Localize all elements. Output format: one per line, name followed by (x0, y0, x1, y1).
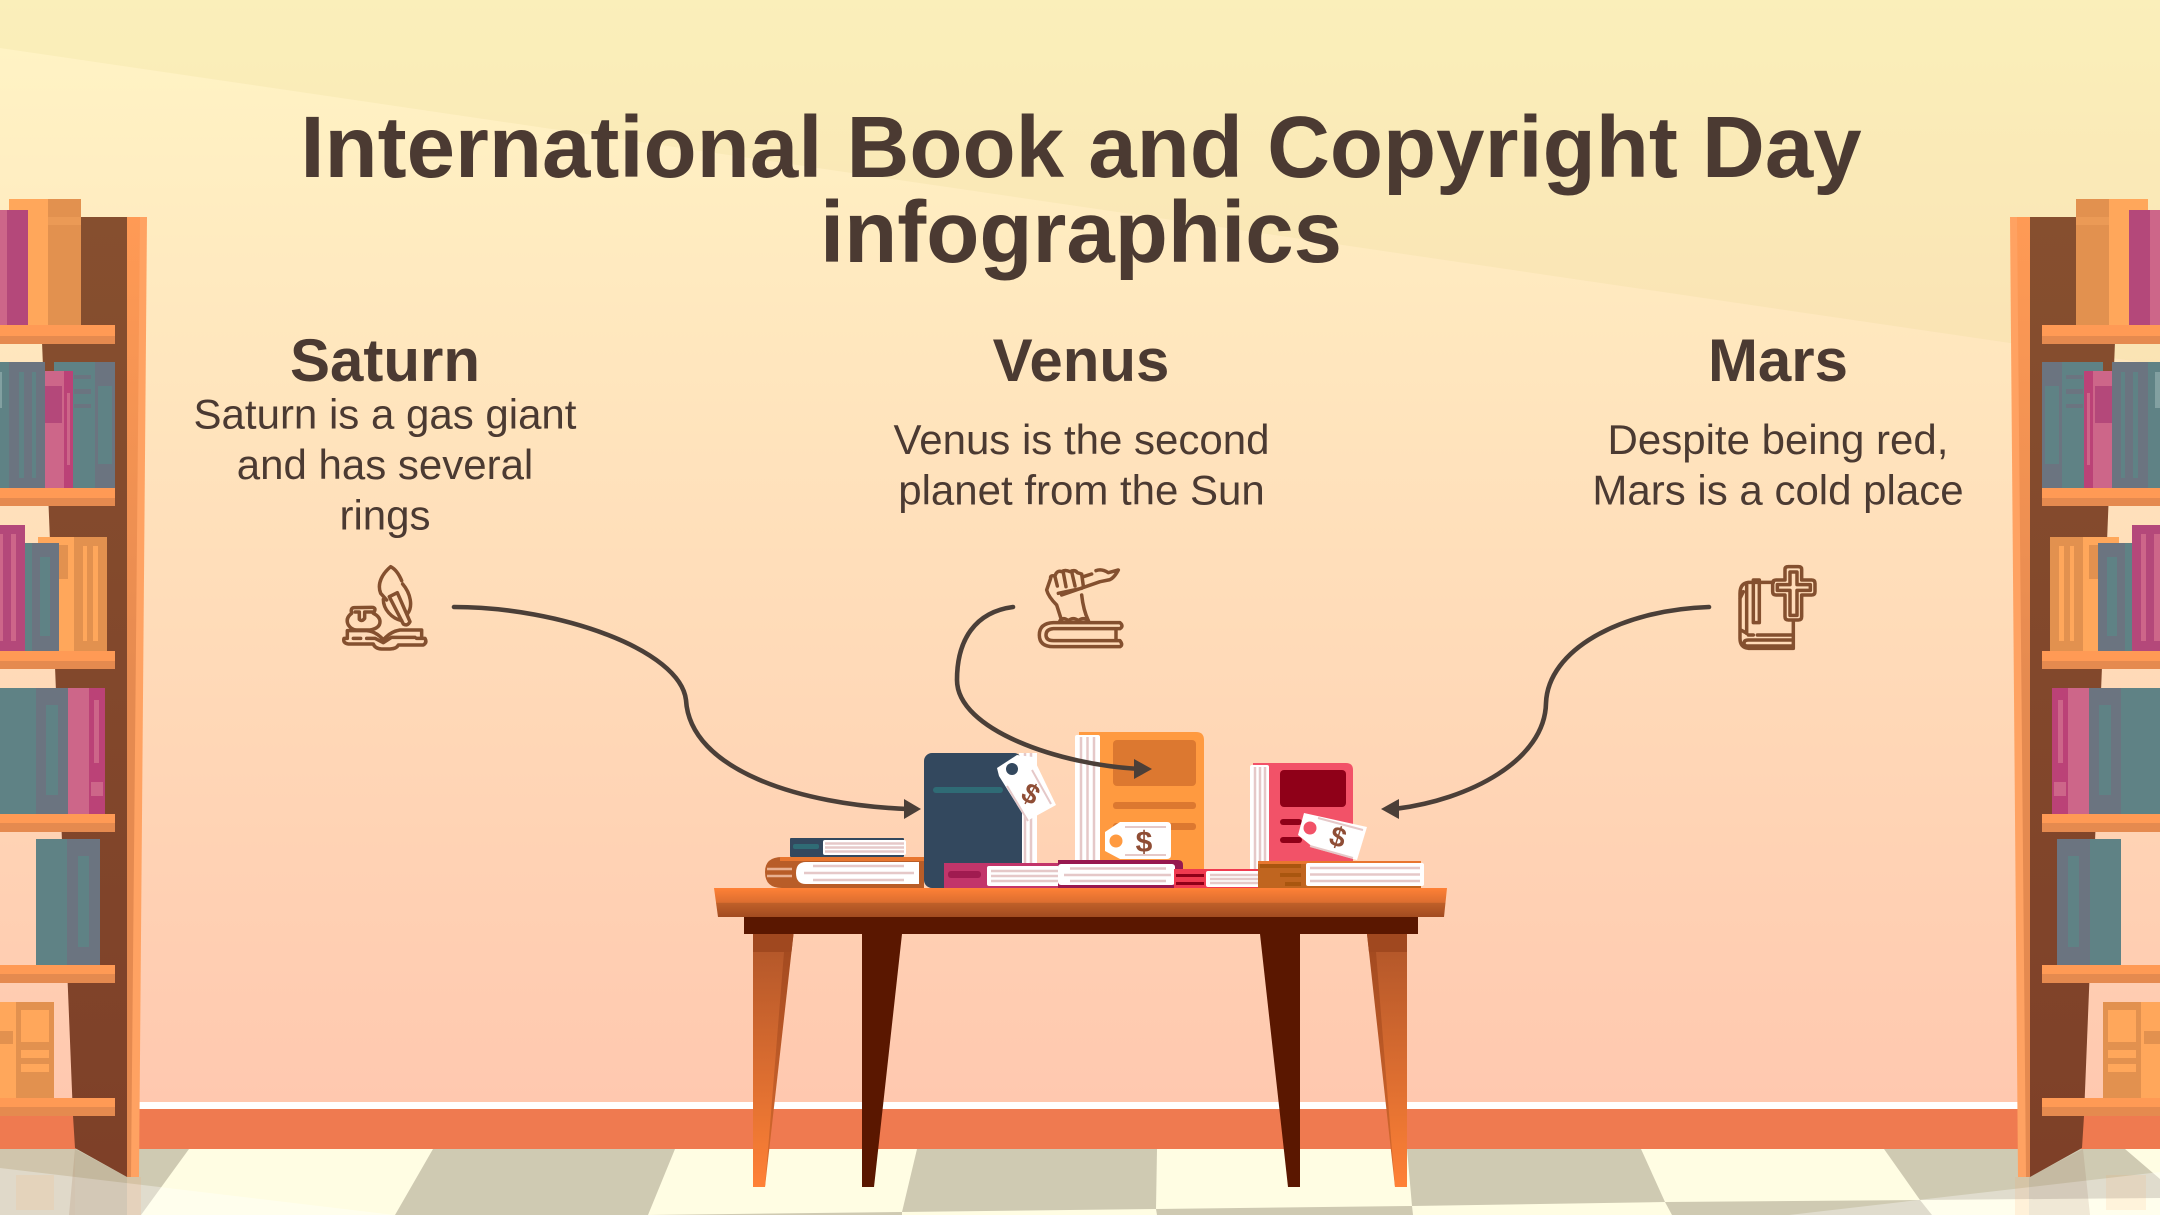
column: Venus (894, 327, 1269, 513)
red book (1250, 763, 1353, 880)
magenta book (944, 863, 1064, 888)
text: Mars description: Despite being red, (1608, 416, 1948, 463)
ceiling shadow (0, 0, 2160, 365)
text: Mars description: Mars is a cold place (1592, 466, 1964, 513)
books on table (765, 732, 1424, 888)
column: Saturn (194, 327, 577, 538)
orange book (1075, 732, 1204, 888)
icon: quill and ink on open book (344, 567, 426, 649)
books row 3 (0, 525, 107, 651)
back legs (862, 934, 1300, 1187)
books row 5 (36, 839, 100, 965)
price tag: red book: $ (1326, 820, 1351, 854)
shelf side board (127, 217, 147, 1177)
books row 4 (0, 688, 105, 814)
price tag: red book (1298, 813, 1367, 860)
navy book (924, 753, 1037, 888)
icon: hand holding pen on book (1039, 570, 1122, 647)
floor reflections (0, 1149, 2160, 1215)
title: International Book and Copyright Day (300, 99, 1862, 196)
title: infographics (820, 184, 1342, 281)
arrow: Venus to orange book (957, 607, 1152, 779)
heading: Mars: Mars (1708, 327, 1848, 394)
front left leg (753, 934, 794, 1187)
heading: Venus: Venus (993, 327, 1169, 394)
front right leg (1367, 934, 1407, 1187)
books row 6 (0, 1002, 54, 1098)
text: Saturn description: Saturn is a gas giant (194, 390, 577, 438)
price tag: navy book: $ (1016, 776, 1046, 811)
red flat book (1174, 869, 1289, 888)
books row 1 (0, 199, 81, 325)
bookshelf: right (2010, 199, 2160, 1177)
table apron (744, 917, 1418, 934)
arrow: Mars to red book (1381, 607, 1709, 819)
text: Venus description: Venus is the second (894, 416, 1269, 463)
text: Saturn description: rings (339, 491, 431, 538)
baseboard (0, 1102, 2160, 1149)
icon: holy book with cross (1740, 567, 1815, 648)
title (300, 99, 1862, 281)
price tag: orange book: $ (1136, 826, 1153, 859)
table (714, 888, 1447, 1187)
books row 2 (0, 362, 115, 488)
shelf boards (0, 325, 115, 1116)
orange flat book (1258, 861, 1424, 888)
price tag: orange book (1105, 822, 1171, 859)
shelf back panel (37, 217, 127, 1177)
arrow: Saturn to navy book (454, 607, 921, 819)
heading: Saturn: Saturn (290, 327, 480, 394)
price tag: navy book (997, 755, 1056, 821)
left stack: bottom book (765, 857, 924, 888)
bookshelf: left (0, 199, 147, 1177)
left stack: top book (790, 838, 906, 857)
column: Mars (1592, 327, 1964, 513)
text: Venus description: planet from the Sun (898, 466, 1265, 513)
table top (714, 888, 1447, 917)
floor tiles (0, 1149, 2160, 1215)
text: Saturn description: and has several (237, 441, 533, 488)
plum book (1058, 860, 1183, 888)
